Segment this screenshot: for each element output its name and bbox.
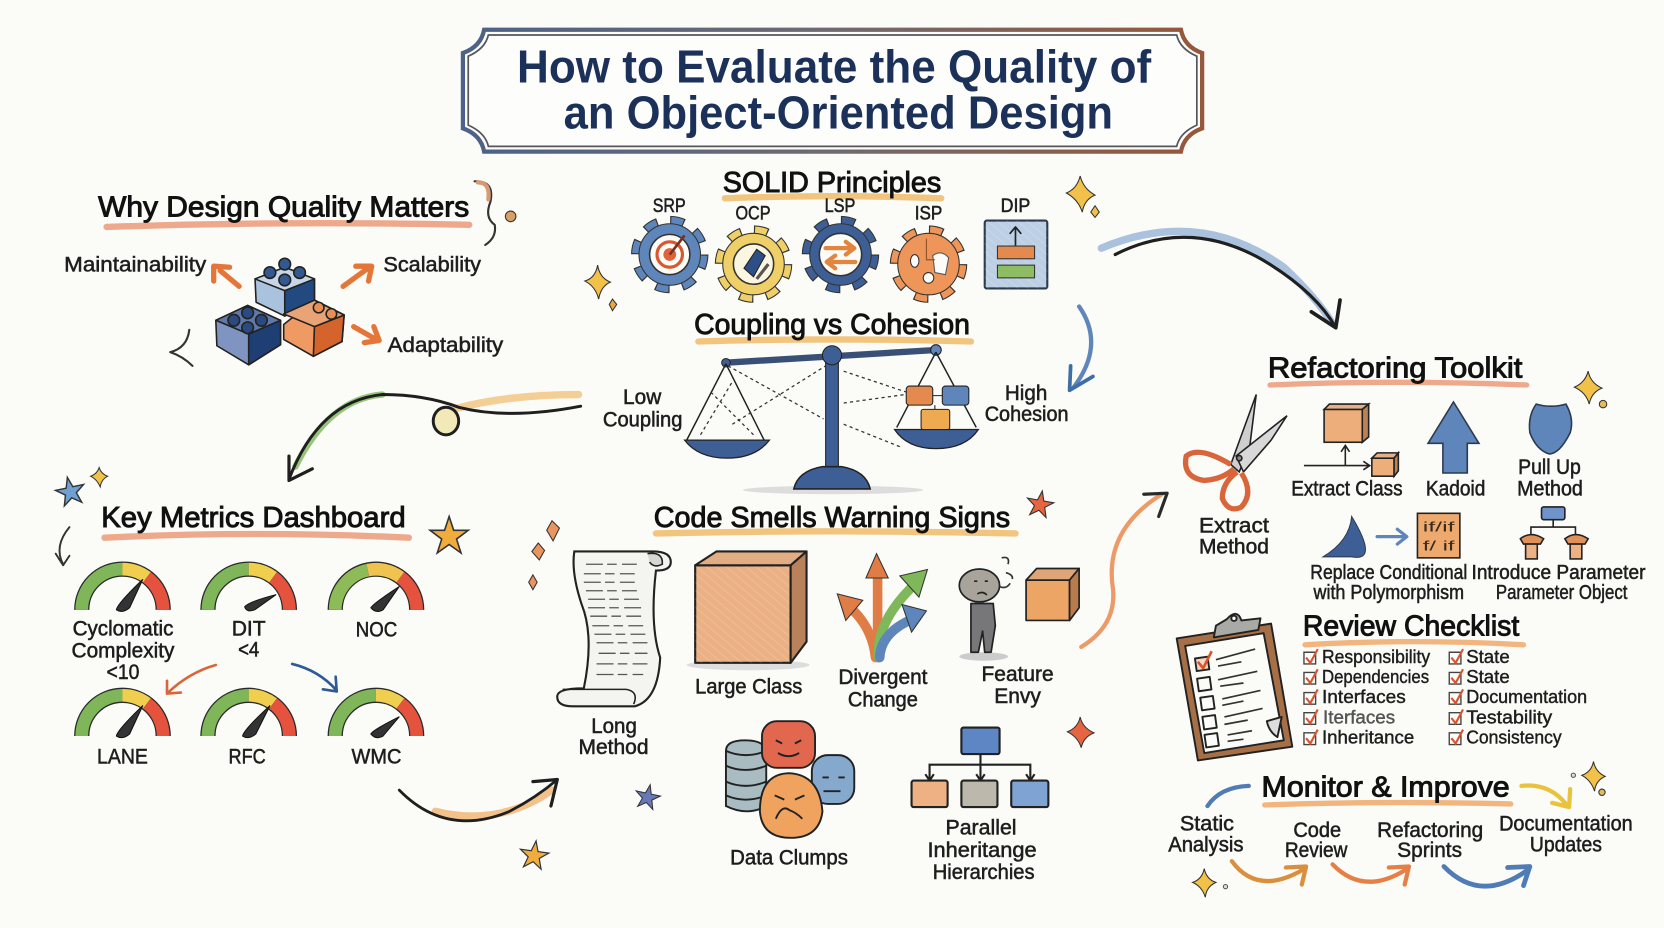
gauge: DIT	[208, 569, 289, 611]
label: extract method: Method	[1199, 536, 1269, 559]
label: introduce parameter object: Introduce Parameter	[1472, 562, 1646, 584]
label: low coupling	[603, 386, 682, 431]
label: parallel inheritance hierarchies: Parallel	[945, 817, 1017, 840]
label: introduce parameter object: Parameter Object	[1496, 582, 1628, 604]
arrow: refactoring to documentation	[1444, 866, 1530, 886]
label: documentation updates: Updates	[1530, 834, 1602, 857]
icon: conditional box	[1417, 513, 1460, 558]
label: refactoring sprints: Refactoring	[1377, 819, 1483, 842]
label: scalability: Scalability	[383, 254, 481, 277]
panel: refactoring toolkit	[1186, 353, 1646, 604]
decoration: orange diamonds	[529, 521, 559, 590]
sparkle: yellow	[1574, 371, 1607, 408]
icon: conditional box: if/if	[1423, 519, 1455, 534]
label: low coupling: Coupling	[603, 408, 682, 431]
label: feature envy: Feature	[982, 663, 1054, 686]
icon: feature envy person and box	[959, 557, 1079, 661]
gauge: RFC	[208, 695, 289, 738]
icon: parallel inheritance tree	[912, 728, 1048, 807]
gear: SRP: SRP	[653, 196, 686, 217]
icon: divergent change arrows	[837, 554, 927, 658]
arrow: to adaptability	[354, 327, 379, 343]
icon: long method scroll	[557, 551, 671, 706]
title banner	[463, 30, 1202, 152]
star: yellow	[518, 839, 550, 870]
gear: LSP: LSP	[825, 196, 855, 217]
arrow: code smells to refactoring	[1081, 493, 1167, 647]
label: long method	[579, 715, 649, 759]
heading: review checklist: Review Checklist	[1303, 610, 1519, 642]
icon: pull up blob	[1529, 404, 1572, 454]
item: state: State	[1466, 646, 1510, 667]
arrow: metrics to code smells	[399, 780, 557, 821]
label: parallel inheritance hierarchies: Inheritange	[927, 839, 1037, 862]
arrow: blue between gauges	[292, 664, 337, 691]
icon: teardrop	[1323, 516, 1365, 557]
label: documentation updates	[1499, 812, 1633, 857]
gear: ISP	[898, 204, 959, 295]
star: orange	[430, 516, 468, 553]
label: LANE: LANE	[97, 746, 148, 769]
item: documentation: Documentation	[1466, 686, 1587, 707]
balance scale	[685, 345, 978, 494]
gear: OCP: OCP	[735, 204, 770, 225]
icon: lego blocks	[216, 258, 344, 365]
heading: monitor and improve: Monitor & Improve	[1262, 771, 1510, 803]
title text: How to Evaluate the Quality of	[517, 41, 1152, 93]
label: NOC: NOC	[356, 618, 397, 641]
label: extract class: Extract Class	[1291, 477, 1403, 500]
item: testability: Testability	[1466, 706, 1553, 727]
gauge: LANE	[82, 695, 163, 738]
icon: data clumps	[726, 721, 854, 838]
icon: parameter object tree	[1520, 507, 1588, 559]
label: WMC: WMC	[352, 746, 401, 769]
decoration: left mark	[170, 330, 192, 366]
gauge: WMC	[335, 695, 417, 738]
label: cyclomatic complexity: <10	[107, 661, 139, 684]
label: large class: Large Class	[695, 676, 802, 699]
label: replace conditional: with Polymorphism	[1313, 582, 1464, 604]
star: navy	[633, 782, 662, 811]
gear: OCP	[723, 204, 784, 295]
checklist items: column 1	[1304, 646, 1431, 747]
panel: review checklist	[1177, 610, 1587, 760]
label: divergent change	[838, 666, 928, 711]
gear: LSP	[810, 196, 871, 285]
label: cyclomatic complexity	[72, 617, 175, 684]
label: static analysis: Analysis	[1168, 834, 1244, 857]
panel: code smells warning signs	[518, 489, 1094, 884]
sparkle: top right	[1571, 761, 1605, 795]
arrow: code to refactoring	[1333, 864, 1409, 885]
label: static analysis: Static	[1180, 812, 1234, 835]
arrow: yellow at heading	[1521, 785, 1570, 807]
label: replace conditional	[1310, 562, 1467, 604]
label: cyclomatic complexity: Complexity	[72, 640, 175, 663]
label: DIT: DIT	[232, 617, 266, 640]
label: divergent change: Change	[848, 688, 918, 711]
gear: ISP: ISP	[915, 204, 942, 225]
label: code review: Code	[1293, 819, 1341, 842]
card: DIP: DIP	[1001, 196, 1030, 217]
label: DIT	[232, 617, 266, 661]
checklist items: column 2	[1449, 646, 1587, 747]
sparkle: left of SOLID	[585, 265, 617, 311]
label: refactoring sprints	[1377, 819, 1483, 862]
label: data clumps: Data Clumps	[730, 846, 848, 869]
label: parallel inheritance hierarchies	[927, 817, 1037, 884]
arrow: orange between gauges	[167, 665, 216, 694]
icon: large class box	[687, 551, 810, 670]
label: high cohesion: High	[1005, 382, 1047, 405]
label: pull up method	[1517, 456, 1583, 500]
gear: SRP	[639, 196, 700, 285]
item: interfaces: Interfaces	[1322, 686, 1406, 707]
sparkle: bottom left	[1193, 869, 1228, 897]
label: low coupling: Low	[623, 386, 662, 409]
label: long method: Long	[591, 715, 637, 738]
icon: up arrow	[1428, 402, 1479, 473]
icon: clipboard	[1177, 614, 1292, 760]
heading: coupling vs cohesion: Coupling vs Cohesion	[694, 309, 970, 341]
label: divergent change: Divergent	[838, 666, 928, 689]
label: extract method: Extract	[1199, 514, 1269, 537]
heading: refactoring toolkit: Refactoring Toolkit	[1268, 353, 1522, 385]
label: introduce parameter object	[1472, 562, 1646, 604]
heading: why design quality matters: Why Design Quality Matters	[98, 191, 469, 223]
label: static analysis	[1168, 812, 1244, 857]
label: feature envy: Envy	[994, 685, 1041, 708]
arrow: SOLID to refactoring toolkit	[1101, 231, 1340, 328]
item: responsibility: Responsibility	[1322, 646, 1431, 667]
arrow: coupling to key metrics	[289, 395, 581, 480]
label: adaptability: Adaptability	[388, 334, 504, 357]
label: high cohesion	[985, 382, 1069, 426]
label: pull up method: Pull Up	[1518, 456, 1581, 479]
arrow: teardrop to conditional	[1377, 529, 1407, 544]
panel: monitor and improve	[1168, 761, 1633, 897]
title frame	[463, 30, 1202, 152]
label: long method: Method	[579, 736, 649, 759]
arrow: to maintainability	[214, 266, 239, 286]
label: cyclomatic complexity: Cyclomatic	[73, 617, 174, 640]
label: code review: Review	[1285, 839, 1348, 862]
label: feature envy	[982, 663, 1054, 708]
label: documentation updates: Documentation	[1499, 812, 1633, 835]
panel: coupling vs cohesion	[603, 309, 1069, 494]
heading: code smells warning signs: Code Smells Warning Signs	[654, 502, 1010, 534]
arrow: static to code	[1232, 861, 1306, 885]
label: code review	[1285, 819, 1348, 862]
decoration: bracket and dot	[475, 181, 516, 245]
label: hoist: Kadoid	[1426, 477, 1485, 500]
gauge: cyclomatic complexity	[82, 569, 163, 611]
sparkle: right of SOLID	[1066, 176, 1099, 217]
label: parallel inheritance hierarchies: Hierarchies	[933, 861, 1035, 884]
label: extract method	[1199, 514, 1269, 559]
gauge: NOC	[335, 569, 417, 611]
label: pull up method: Method	[1517, 477, 1583, 500]
star: blue	[53, 474, 87, 507]
label: replace conditional: Replace Conditional	[1310, 562, 1467, 584]
heading: key metrics dashboard: Key Metrics Dashboard	[101, 502, 406, 534]
item: interfaces second: Iterfaces	[1323, 706, 1395, 727]
label: refactoring sprints: Sprints	[1397, 839, 1462, 862]
arrow: SOLID to coupling	[1070, 307, 1093, 390]
sparkle: red	[1067, 717, 1094, 748]
label: RFC: RFC	[229, 746, 266, 769]
icon: scissors	[1186, 395, 1287, 509]
panel: why design quality matters	[64, 181, 516, 366]
label: DIT: <4	[238, 638, 259, 661]
icon: extract class cubes	[1304, 404, 1398, 476]
heading: SOLID principles: SOLID Principles	[723, 167, 941, 199]
card: DIP	[985, 196, 1047, 288]
title text	[517, 41, 1152, 138]
icon: conditional box: f/ if	[1423, 538, 1455, 553]
item: consistency: Consistency	[1466, 726, 1562, 747]
label: maintainability: Maintainability	[64, 254, 207, 277]
arrow: blue arc at heading	[1207, 786, 1249, 806]
label: high cohesion: Cohesion	[985, 403, 1069, 426]
item: dependencies: Dependencies	[1322, 666, 1429, 687]
title text: an Object-Oriented Design	[564, 86, 1113, 138]
decoration: curved pointer	[56, 527, 69, 565]
arrow: to scalability	[343, 266, 372, 286]
panel: key metrics dashboard	[53, 468, 468, 769]
item: inheritance: Inheritance	[1322, 726, 1414, 747]
panel: SOLID principles	[585, 167, 1099, 311]
star: red-orange	[1025, 489, 1055, 518]
sparkle: small yellow	[91, 468, 108, 487]
item: state second: State	[1466, 666, 1510, 687]
